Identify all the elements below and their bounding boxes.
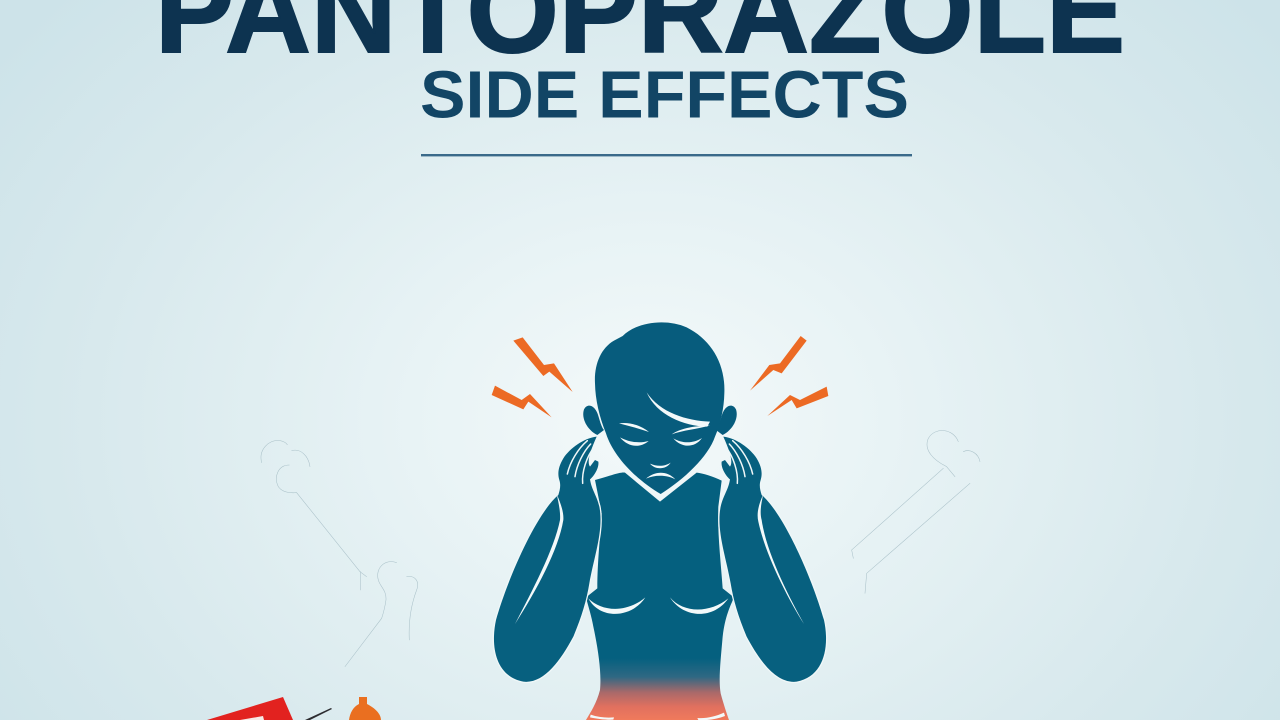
face and body highlight lines [515, 392, 804, 720]
figure: person with headache and stomach pain [492, 322, 828, 720]
torso [585, 473, 734, 720]
left ear [583, 406, 604, 435]
icon: syringe needle [305, 708, 332, 720]
right arm and hand [719, 437, 826, 682]
icon: faint bones left [261, 441, 418, 667]
icon: faint bone right [852, 431, 980, 593]
head [595, 322, 724, 494]
left arm and hand [494, 437, 601, 682]
icon: pain bolts [492, 336, 828, 417]
title rule [421, 154, 912, 156]
icon: orange bottle [349, 697, 381, 720]
right ear [716, 406, 737, 435]
finger lines [567, 441, 753, 483]
subtitle: SIDE EFFECTS [420, 58, 909, 132]
icon: red medicine box [207, 697, 293, 720]
